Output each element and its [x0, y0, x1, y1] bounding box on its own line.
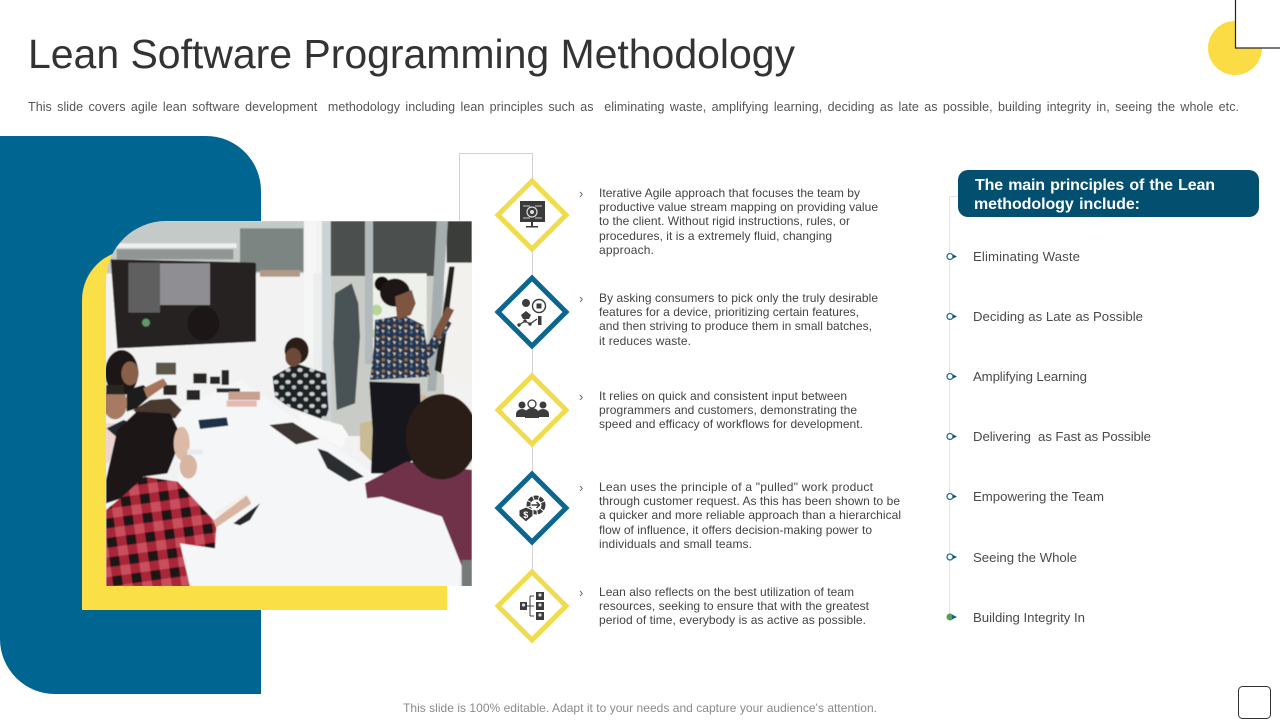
step 5: diamond icon and text [498, 572, 870, 640]
text block 1: productive value stream mapping on providing value [599, 200, 878, 214]
text block 3: It relies on quick and consistent input between [599, 389, 847, 403]
text block 5: Lean also reflects on the best utilization of team [599, 585, 854, 599]
whiteboard [440, 355, 444, 374]
bullet chevron: › [579, 480, 583, 495]
principles list connector [950, 196, 958, 617]
curly-haired woman [365, 462, 472, 567]
icon: org hierarchy [520, 592, 544, 620]
principles heading box: methodology include: [974, 196, 1140, 213]
text block 4: Lean uses the principle of a "pulled" work product [599, 480, 874, 494]
text block 5: period of time, everybody is as active as possible. [599, 613, 866, 627]
step 2: diamond icon and text [498, 278, 878, 348]
principle 4: Delivering as Fast as Possible [973, 429, 1151, 444]
blue background panel [0, 136, 261, 694]
bullet chevron: › [579, 389, 583, 404]
text block 5 [599, 585, 870, 627]
text block 5: resources, seeking to ensure that with the greatest [599, 599, 870, 613]
diamond 5 [498, 572, 566, 640]
text block 4 [599, 480, 901, 551]
text block 1: to the client. Without rigid instructions, rules, or [599, 214, 850, 228]
text block 1: approach. [599, 243, 654, 257]
bullet chevron: › [579, 291, 583, 306]
corner decoration: yellow circle with white square [1208, 0, 1280, 75]
text block 1 [599, 186, 878, 257]
principle 5: Empowering the Team [973, 489, 1104, 504]
principles heading box: The main principles of the Lean [975, 177, 1215, 194]
principles heading box [958, 170, 1259, 217]
footer note: This slide is 100% editable. Adapt it to your needs and capture your audience's attention. [403, 701, 877, 715]
text block 4: individuals and small teams. [599, 537, 752, 551]
desk clutter [156, 363, 176, 375]
principle 3: Amplifying Learning [973, 369, 1087, 384]
text block 3: programmers and customers, demonstrating the [599, 403, 857, 417]
icon: presentation monitor [520, 201, 545, 228]
text block 1: procedures, it is a extremely fluid, changing [599, 229, 832, 243]
diamond 1 [498, 181, 566, 249]
subtitle description: This slide covers agile lean software development methodology including lean principles such as eliminating waste, amplifying learning, deciding as late as possible, building integrity in, seeing the whole etc. [28, 100, 1239, 114]
diamond 3 [498, 376, 566, 444]
text block 2: it reduces waste. [599, 334, 691, 348]
corner outline box [1238, 686, 1270, 718]
icon: gear with dollar shield [519, 498, 544, 522]
text block 4: through customer request. As this has been shown to be [599, 494, 900, 508]
step 4: diamond icon and text [498, 474, 901, 551]
left group [105, 350, 138, 395]
text block 3: speed and efficacy of workflows for development. [599, 417, 863, 431]
icon: gear with dollar shield: $ [523, 510, 528, 520]
bullet chevron: › [579, 186, 583, 201]
TV [111, 259, 256, 348]
principle 1: Eliminating Waste [973, 249, 1080, 264]
text block 3 [599, 389, 863, 431]
text block 4: flow of influence, it offers decision-making power to [599, 523, 872, 537]
text block 2: features for a device, prioritizing certain features, [599, 305, 859, 319]
timeline connector [460, 154, 532, 606]
bullet chevron: › [579, 585, 583, 600]
standing woman [369, 382, 421, 473]
step 1: diamond icon and text [498, 181, 878, 257]
diamond 2 [498, 278, 566, 346]
table [177, 380, 462, 586]
principle 7: Building Integrity In [973, 610, 1085, 625]
text block 2: By asking consumers to pick only the truly desirable [599, 291, 878, 305]
principle 6: Seeing the Whole [973, 550, 1077, 565]
principle 2: Deciding as Late as Possible [973, 309, 1143, 324]
text block 1: Iterative Agile approach that focuses the team by [599, 186, 860, 200]
step 3: diamond icon and text [498, 376, 863, 444]
seated woman [273, 363, 329, 420]
diamond 4 [498, 474, 566, 542]
icon: user analysis [517, 299, 546, 327]
team meeting photo [103, 220, 478, 587]
icon: three people [516, 400, 549, 418]
title: Lean Software Programming Methodology [28, 31, 796, 77]
text block 2: and then striving to produce them in small batches, [599, 319, 872, 333]
text block 4: a quicker and more reliable approach than a hierarchical [599, 508, 901, 522]
text block 2 [599, 291, 878, 348]
yellow backing shape [82, 250, 447, 610]
